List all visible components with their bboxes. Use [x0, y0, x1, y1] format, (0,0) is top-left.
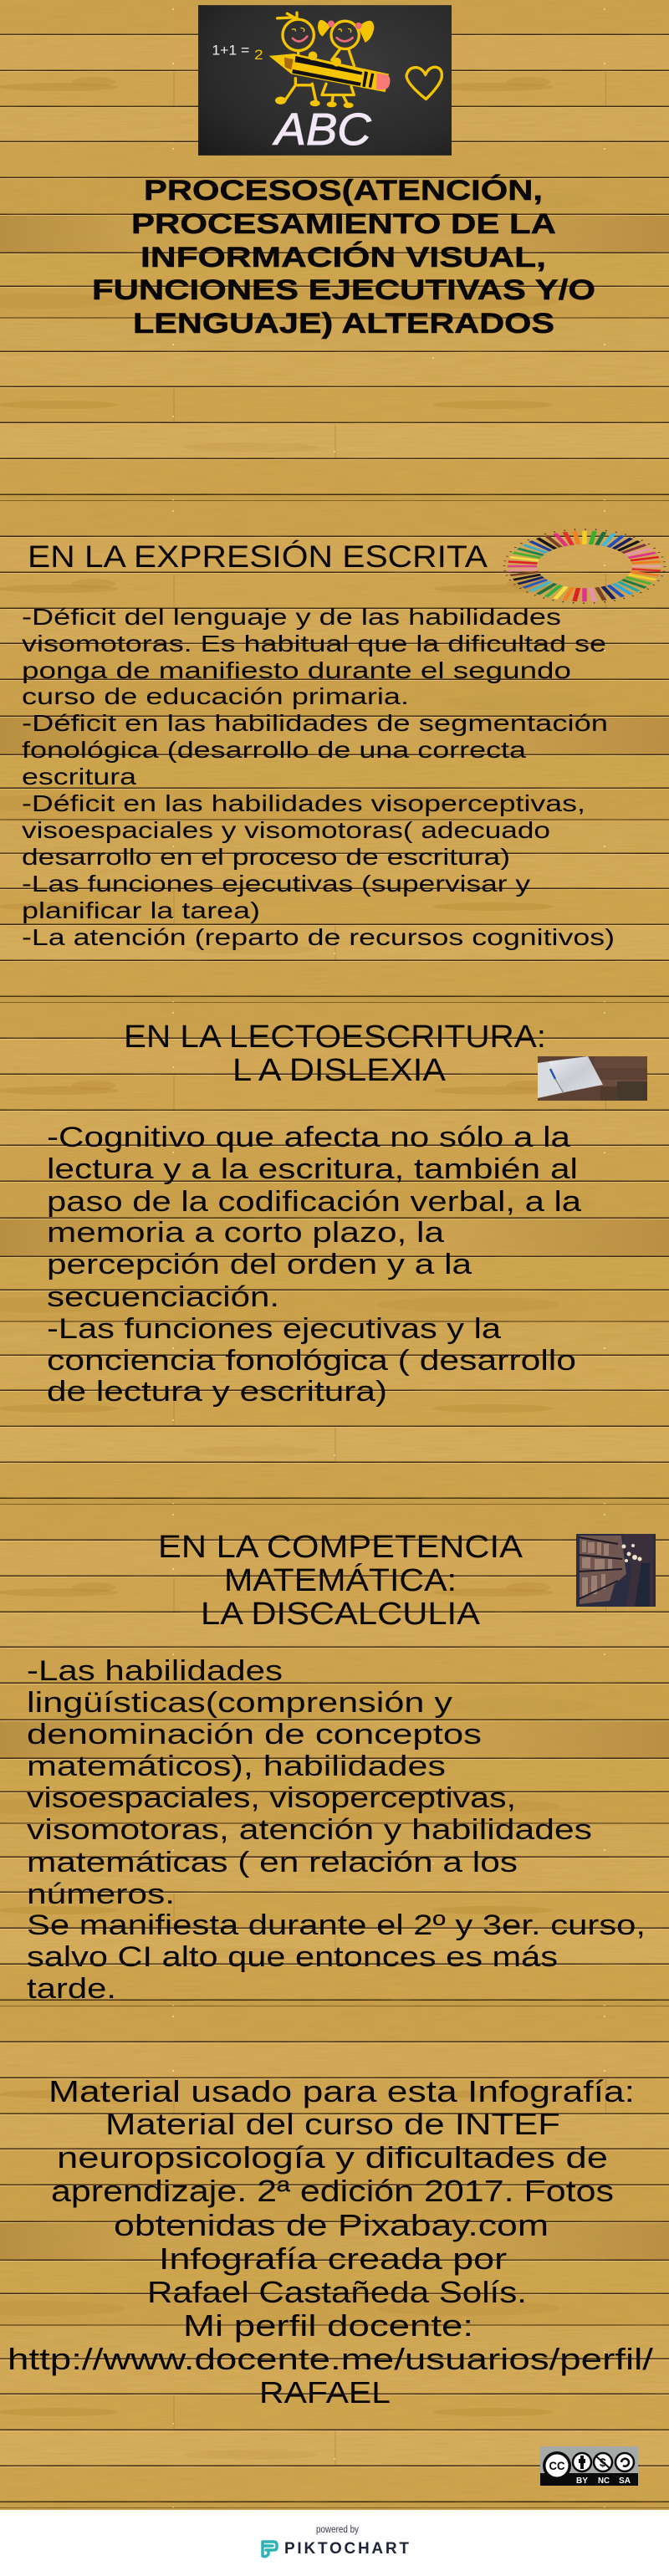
text block: expresión escrita: planificar la tarea)	[22, 897, 260, 923]
text block: discalculia: números.	[27, 1878, 175, 1910]
text block: credits: neuropsicología y dificultades de	[57, 2140, 608, 2175]
text block: expresión escrita	[22, 604, 615, 950]
text block: dislexia: lectura y a la escritura, también al	[47, 1153, 578, 1185]
text block: expresión escrita: fonológica (desarrollo de una correcta	[22, 737, 527, 763]
faces	[292, 28, 353, 41]
text block: dislexia	[47, 1122, 581, 1408]
text block: discalculia: denominación de conceptos	[27, 1719, 482, 1751]
text block: credits: RAFAEL	[259, 2375, 391, 2410]
chalk sum: 1+1 =	[212, 42, 249, 59]
bows	[328, 20, 362, 29]
text block: credits: obtenidas de Pixabay.com	[114, 2208, 549, 2242]
text block: credits: Mi perfil docente:	[183, 2308, 473, 2343]
text block: discalculia: lingüísticas(comprensión y	[27, 1687, 452, 1719]
text block: expresión escrita: curso de educación primaria.	[22, 683, 409, 709]
icon: creative commons BY NC SA badge: BY	[576, 2476, 588, 2486]
icon: ring of coloured pencils	[504, 529, 665, 603]
icon: creative commons BY NC SA badge: NC	[598, 2476, 610, 2486]
heart	[406, 67, 442, 99]
text block: expresión escrita: desarrollo en el proceso de escritura)	[22, 844, 510, 870]
text block: credits: Infografía creada por	[159, 2241, 507, 2276]
text block: discalculia: salvo CI alto que entonces es más	[27, 1941, 558, 1973]
text block: discalculia: visomotoras, atención y habilidades	[27, 1814, 592, 1846]
icon: creative commons BY NC SA badge: SA	[619, 2476, 631, 2486]
heading: en la expresión escrita: EN LA EXPRESIÓN ESCRITA	[28, 539, 488, 574]
text block: expresión escrita: visoespaciales y visomotoras( adecuado	[22, 817, 550, 843]
title: PROCESAMIENTO DE LA	[131, 208, 556, 240]
text block: credits	[8, 2074, 653, 2410]
text block: expresión escrita: -Déficit en las habilidades visoperceptivas,	[22, 790, 585, 816]
heading: en la lectoescritura: EN LA LECTOESCRITURA:	[124, 1020, 546, 1055]
text block: dislexia: -Las funciones ejecutivas y la	[47, 1313, 501, 1345]
text block: credits: Rafael Castañeda Solís.	[147, 2275, 527, 2309]
title: FUNCIONES EJECUTIVAS Y/O	[92, 274, 595, 306]
hair and feet	[275, 20, 374, 108]
title: LENGUAJE) ALTERADOS	[133, 308, 554, 340]
text block: discalculia	[27, 1655, 646, 2005]
title	[92, 175, 595, 340]
text block: expresión escrita: escritura	[22, 764, 137, 790]
icon: creative commons BY NC SA badge: CC	[549, 2459, 565, 2472]
text block: discalculia: visoespaciales, visoperceptivas,	[27, 1782, 516, 1814]
heading: en la competencia matemática: LA DISCALCULIA	[201, 1597, 481, 1632]
text block: discalculia: matemáticos), habilidades	[27, 1751, 446, 1782]
text block: credits: Material del curso de INTEF	[105, 2107, 560, 2141]
heading: en la lectoescritura: L A DISLEXIA	[232, 1053, 447, 1088]
image: library bookshelves	[576, 1534, 656, 1607]
icon: creative commons BY NC SA badge: $	[600, 2456, 606, 2469]
text block: discalculia: matemáticas ( en relación a los	[27, 1847, 518, 1878]
text block: dislexia: de lectura y escritura)	[47, 1376, 387, 1408]
text block: dislexia: conciencia fonológica ( desarrollo	[47, 1345, 576, 1377]
image: notebook on wooden table	[538, 1056, 647, 1101]
heading: en la competencia matemática: EN LA COMPETENCIA	[158, 1530, 523, 1565]
text block: dislexia: percepción del orden y a la	[47, 1249, 472, 1280]
text block: expresión escrita: -La atención (reparto de recursos cognitivos)	[22, 924, 615, 950]
image: chalkboard with children and pencil	[198, 5, 452, 156]
text block: dislexia: secuenciación.	[47, 1281, 279, 1313]
text block: expresión escrita: -Déficit en las habilidades de segmentación	[22, 710, 608, 736]
text block: dislexia: memoria a corto plazo, la	[47, 1217, 444, 1249]
text block: discalculia: tarde.	[27, 1973, 116, 2005]
footer: piktochart wordmark: PIKTOCHART	[284, 2540, 409, 2558]
text block: expresión escrita: visomotoras. Es habitual que la dificultad se	[22, 631, 606, 657]
children figures	[278, 13, 359, 106]
text block: discalculia: -Las habilidades	[27, 1655, 283, 1687]
text block: dislexia: paso de la codificación verbal, a la	[47, 1186, 581, 1218]
title: INFORMACIÓN VISUAL,	[140, 242, 546, 273]
heading: en la competencia matemática	[158, 1530, 523, 1632]
text block: discalculia: Se manifiesta durante el 2º y 3er. curso,	[27, 1909, 646, 1941]
title: PROCESOS(ATENCIÓN,	[144, 175, 543, 207]
footer: powered by: powered by	[316, 2525, 359, 2535]
heading: en la competencia matemática: MATEMÁTICA:	[224, 1562, 457, 1598]
text block: expresión escrita: ponga de manifiesto durante el segundo	[22, 657, 571, 683]
text block: credits: aprendizaje. 2ª edición 2017. Fotos	[51, 2174, 614, 2208]
text block: expresión escrita: -Déficit del lenguaje y de las habilidades	[22, 604, 561, 630]
chalk sum result: 2	[254, 47, 263, 63]
footer: white strip	[0, 2510, 669, 2576]
chalk letters ABC: ABC	[273, 105, 371, 155]
heading: en la lectoescritura	[124, 1020, 546, 1088]
icon: creative commons BY NC SA badge	[540, 2446, 638, 2486]
pencil	[269, 52, 390, 92]
text block: credits: Material usado para esta Infografía:	[49, 2074, 635, 2108]
text block: credits: http://www.docente.me/usuarios/perfil/	[8, 2342, 653, 2376]
text block: expresión escrita: -Las funciones ejecutivas (supervisar y	[22, 871, 530, 897]
icon: piktochart logo	[263, 2542, 277, 2557]
text block: dislexia: -Cognitivo que afecta no sólo a la	[47, 1122, 570, 1153]
